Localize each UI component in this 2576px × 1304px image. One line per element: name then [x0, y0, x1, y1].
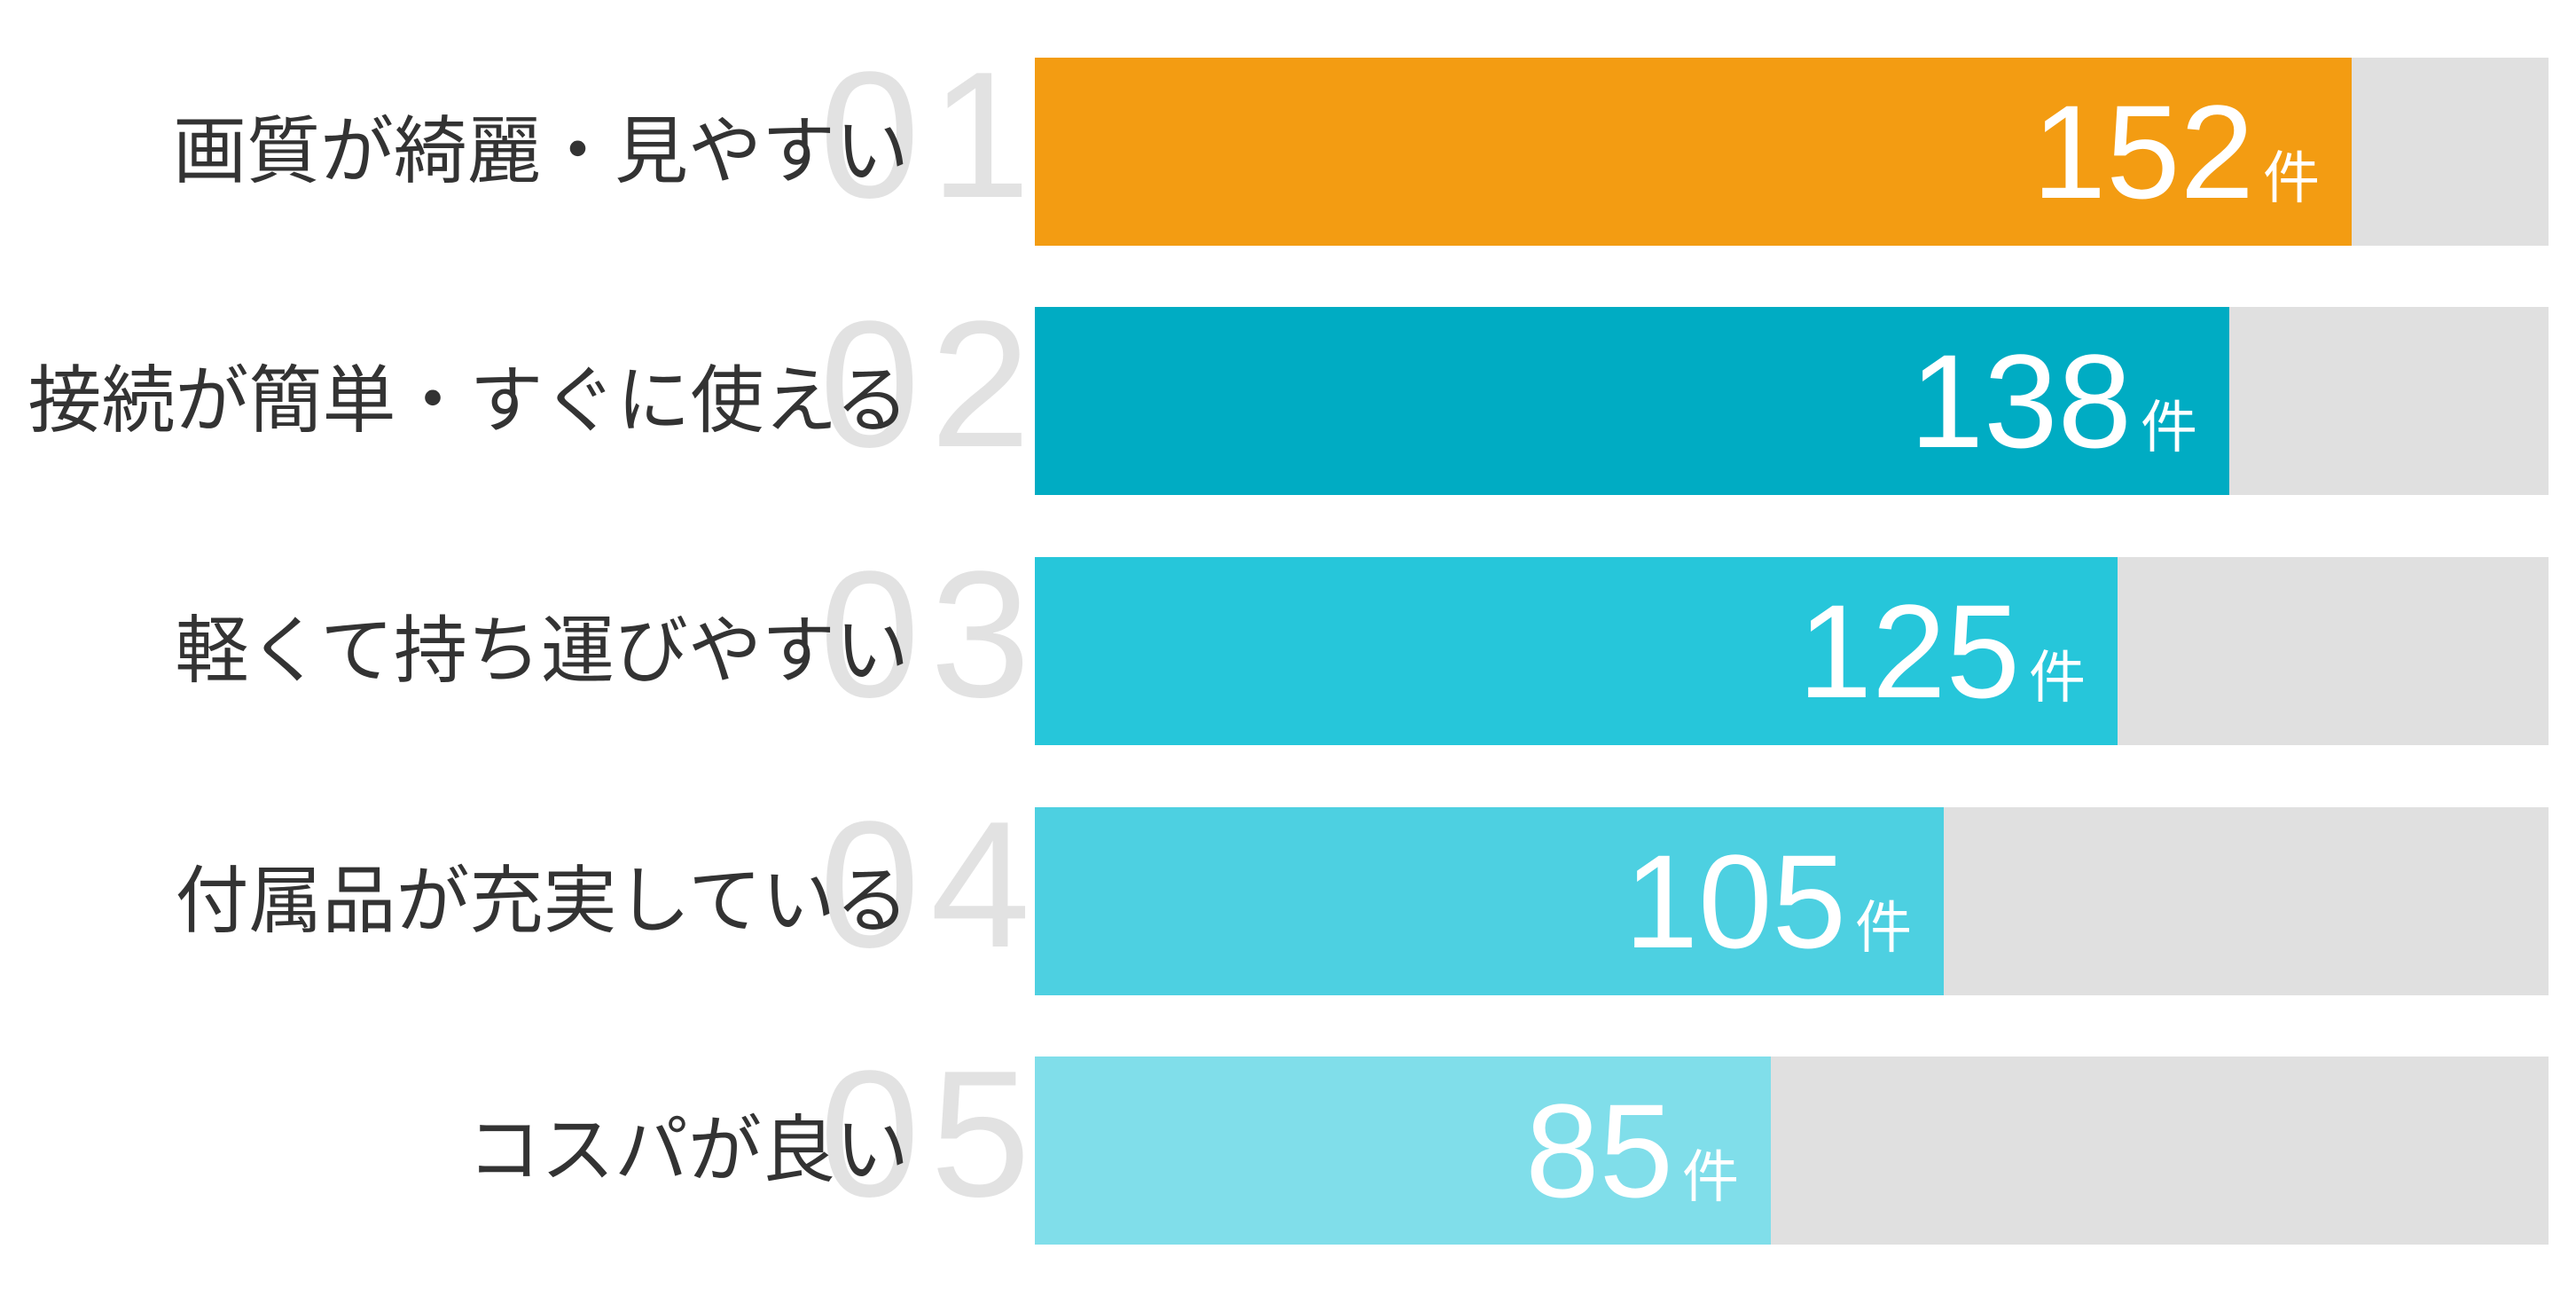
bar 5: 85件 [1525, 1076, 1739, 1225]
rank 04: 04 [819, 784, 1041, 986]
row 1 [173, 35, 2549, 246]
row 3 [175, 534, 2549, 745]
rank 02: 02 [819, 284, 1041, 485]
label 2: 接続が簡単・すぐに使える [27, 359, 909, 442]
bar 1 [1035, 58, 2549, 246]
bar 4: 105件 [1625, 827, 1912, 976]
row 4 [175, 784, 2549, 995]
bar 2: 138件 [1910, 326, 2197, 475]
label 3: 軽くて持ち運びやすい [175, 609, 909, 692]
bar 3 [1035, 557, 2549, 745]
label 1: 画質が綺麗・見やすい [173, 110, 909, 192]
row 2 [27, 284, 2549, 495]
bar 1: 152件 [2032, 77, 2320, 226]
label 4: 付属品が充実している [175, 860, 909, 942]
bar 3: 125件 [1798, 577, 2086, 726]
bar 2 [1035, 307, 2549, 495]
bar 4 [1035, 807, 2549, 995]
rank 03: 03 [819, 534, 1041, 735]
row 5 [467, 1033, 2549, 1245]
bar 5 [1035, 1057, 2549, 1245]
label 5: コスパが良い [467, 1109, 909, 1191]
rank 05: 05 [819, 1033, 1041, 1235]
rank 01: 01 [819, 35, 1041, 236]
